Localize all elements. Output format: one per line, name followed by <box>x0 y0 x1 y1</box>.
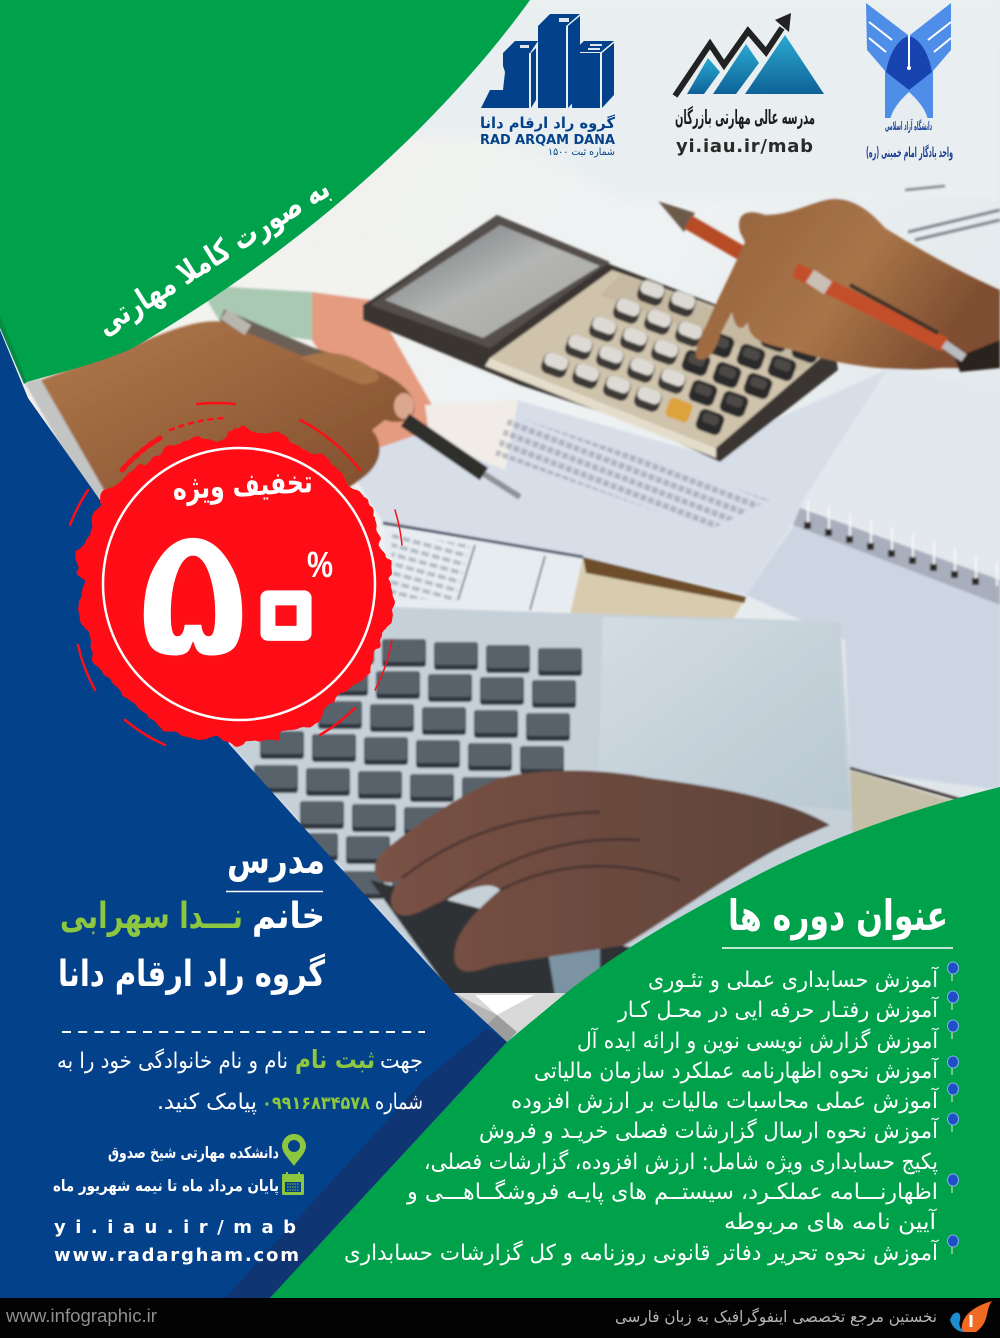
ribbon text: به صورت کاملا مهارتی <box>90 170 336 343</box>
spiral shadow band <box>793 508 1000 605</box>
course list: آموزش گزارش نویسی نوین و ارائه ایده آل <box>577 1027 939 1054</box>
laptop keys <box>226 630 582 902</box>
instructor name: نـــدا سهرابی <box>60 896 243 937</box>
upper left hand <box>27 321 415 520</box>
zero ring: ۰ <box>223 482 349 724</box>
upper right hand <box>696 199 1000 369</box>
badge heading: تخفیف ویژه <box>172 464 313 507</box>
panel: left blue shape <box>0 330 507 1298</box>
photo: hands on calculator and laptop <box>0 0 1000 1000</box>
left fingernail <box>394 393 414 419</box>
course list: اظهارنـــامه عملکـرد، سیستــم های پایـه فروشگــاهـــی و <box>406 1179 938 1205</box>
date text: پایان مرداد ماه تا نیمه شهریور ماه <box>53 1176 279 1196</box>
course list: آموزش رفتـار حرفه ایی در محـل کـار <box>617 996 939 1023</box>
icon: calendar <box>282 1172 304 1195</box>
registration text: شماره <box>375 1090 423 1115</box>
pen upper front <box>795 270 945 345</box>
panel: bottom-right green shape <box>270 787 1000 1298</box>
discount badge <box>70 403 402 745</box>
instructor heading: مدرس <box>227 838 325 882</box>
course list: آموزش نحوه ارسال گزارشات فصلی خریـد و فروش <box>479 1117 939 1144</box>
panel: top-left green shape <box>0 0 530 384</box>
Rad logo registration: شماره ثبت ۱۵۰۰ <box>548 147 615 158</box>
desk corner <box>850 770 1000 890</box>
logo: business school: مدرسه عالی مهارتی بازرگان <box>675 105 815 129</box>
pen upper rear <box>658 201 695 232</box>
location text: دانشکده مهارتی شیخ صدوق <box>108 1143 279 1162</box>
left laptop silver edge <box>24 378 104 505</box>
wood desk <box>570 557 746 625</box>
lower hand <box>375 770 830 971</box>
course list: آیین نامه های مربوطه <box>724 1208 937 1235</box>
footer icon <box>950 1301 992 1332</box>
calculator <box>363 215 838 462</box>
logo: Rad Argham Dana <box>480 14 615 158</box>
finger over pen <box>300 353 379 384</box>
course list: آموزش نحوه تحریر دفاتر قانونی روزنامه و کل گزارشات حسابداری <box>344 1239 939 1266</box>
table on main paper <box>495 415 770 530</box>
Rad logo Latin name: RAD ARQAM DANA <box>480 133 615 148</box>
course list: آموزش حسابداری عملی و تئـوری <box>648 966 939 993</box>
bullet pins <box>948 962 958 1254</box>
registration text: نام و نام خانوادگی خود را به <box>57 1048 288 1074</box>
course list <box>344 966 939 1266</box>
registration text: ثبت نام <box>295 1045 375 1074</box>
top background blur <box>405 0 1000 200</box>
white ledger strip <box>425 400 518 470</box>
notebook upper page <box>800 365 1000 575</box>
registration text: جهت <box>380 1049 423 1074</box>
trackpad <box>598 617 850 810</box>
salmon paper patch <box>312 292 452 470</box>
registration text: پیامک کنید. <box>157 1090 257 1115</box>
instructor group: گروه راد ارقام دانا <box>58 953 325 995</box>
background sheet lines <box>905 186 1000 240</box>
instructor block <box>58 838 325 995</box>
school website: yi.iau.ir/mab <box>676 136 813 157</box>
Rad logo Persian name: گروه راد ارقام دانا <box>480 114 615 132</box>
notebook lower page <box>746 520 1000 790</box>
second paper with table <box>383 526 585 612</box>
big number 50: ۵ <box>135 481 251 702</box>
gray triangles <box>440 993 580 1053</box>
percent sign: % <box>307 544 333 585</box>
lower keyboard dark <box>370 880 640 995</box>
pen left front <box>405 420 484 474</box>
footer tagline: نخستین مرجع تخصصی اینفوگرافیک به زبان فارسی <box>615 1307 937 1327</box>
icon: location pin <box>282 1134 306 1166</box>
white band <box>236 235 440 300</box>
green paper patch <box>198 285 312 340</box>
course list: آموزش عملی محاسبات مالیات بر ارزش افزوده <box>511 1087 939 1114</box>
footer bar <box>0 1298 1000 1338</box>
main paper <box>344 367 893 595</box>
pen left rear <box>222 315 345 368</box>
course list: پکیج حسابداری ویژه شامل: ارزش افزوده، گزارشات فصلی، <box>424 1149 938 1175</box>
website one: yi.iau.ir/mab <box>54 1217 296 1238</box>
instructor title: خانم <box>252 896 325 937</box>
logo: Azad University <box>866 3 953 161</box>
registration text: ۰۹۹۱۶۸۳۴۵۷۸ <box>262 1093 370 1114</box>
registration text <box>57 1045 423 1115</box>
spiral binding <box>808 500 997 586</box>
website two: www.radargham.com <box>54 1245 299 1266</box>
logo: business school <box>675 13 824 157</box>
laptop body <box>230 607 858 1000</box>
course list: آموزش نحوه اظهارنامه عملکرد سازمان مالیاتی <box>534 1057 939 1084</box>
footer url: www.infographic.ir <box>5 1306 157 1326</box>
